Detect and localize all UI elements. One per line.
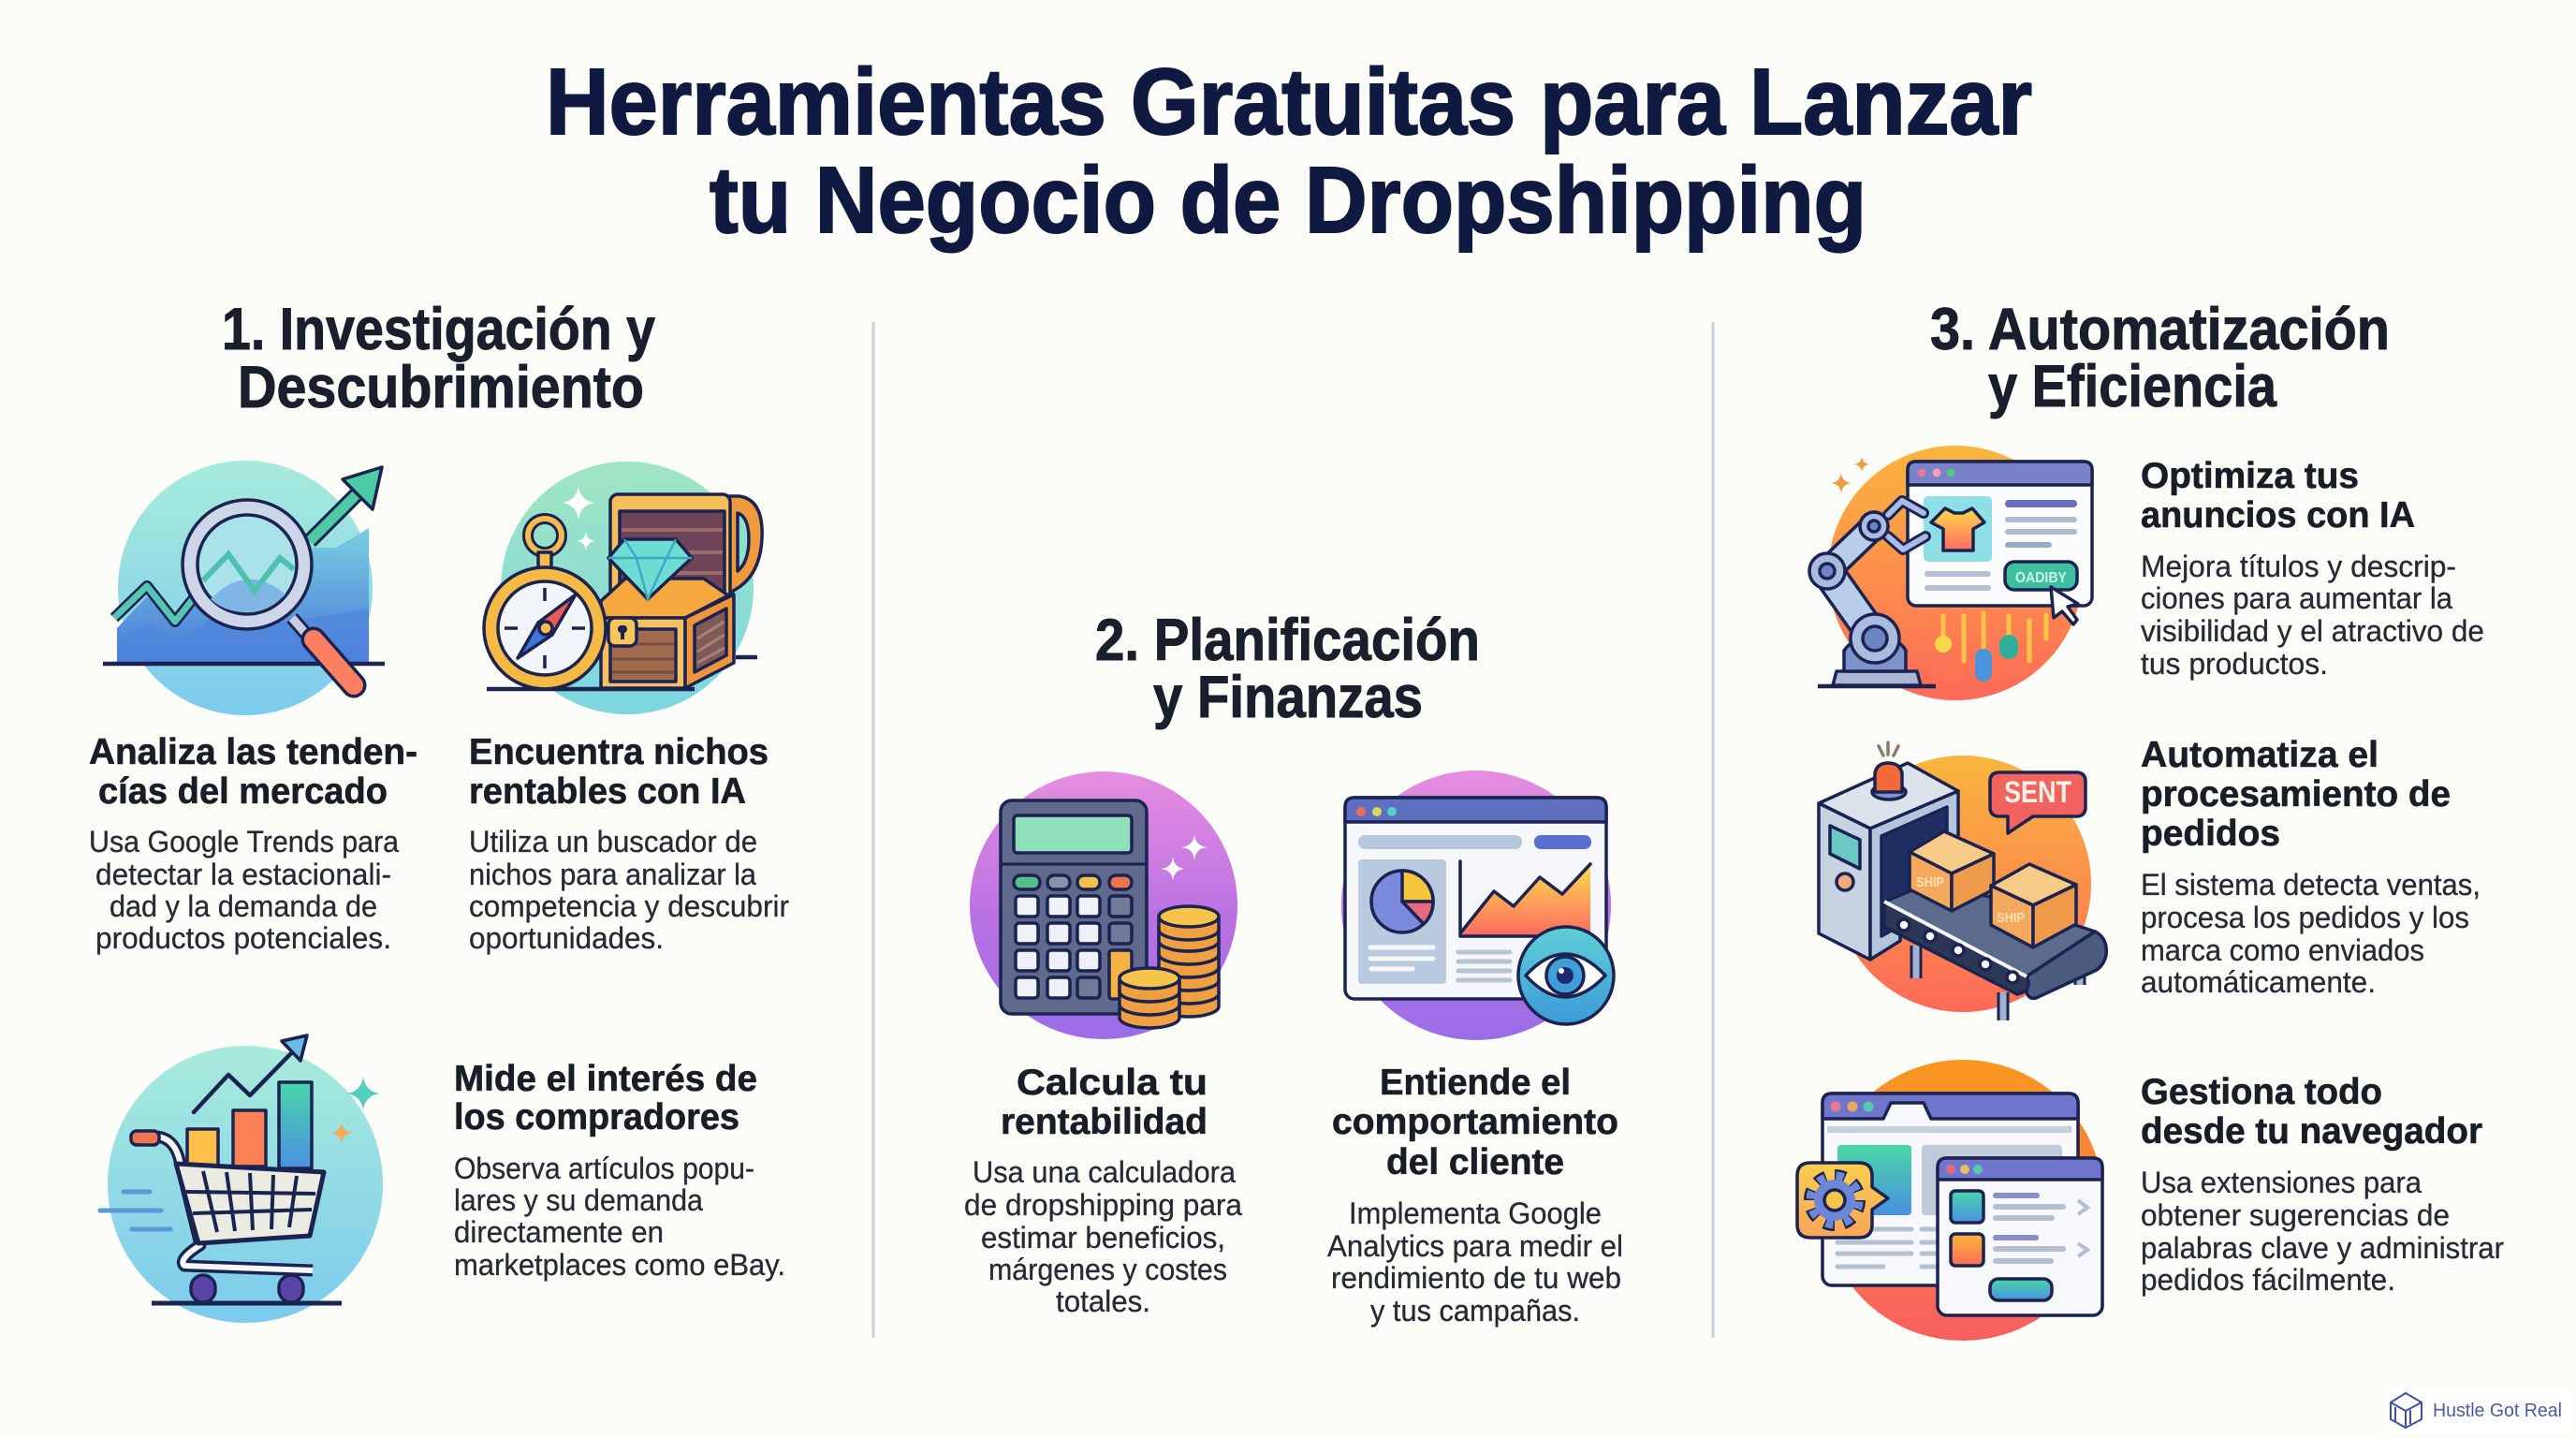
heading: section 2 [1095, 608, 1480, 730]
item text: entiende el comportamiento: y tus campañas. [1370, 1294, 1580, 1328]
title [546, 50, 2032, 253]
item text: optimiza tus anuncios: ciones para aumentar la [2141, 581, 2452, 615]
item heading: entiende el comportamiento: comportamiento [1332, 1102, 1618, 1142]
item text: automatiza el procesamiento: procesa los pedidos y los [2141, 901, 2469, 934]
item heading: encuentra nichos: rentables con IA [469, 771, 746, 812]
panel: automatización y eficiencia [1797, 297, 2504, 1341]
item text: entiende el comportamiento: Analytics para medir el [1327, 1229, 1623, 1263]
item text: gestiona todo [2141, 1166, 2504, 1297]
item heading: automatiza el procesamiento: Automatiza el [2141, 735, 2378, 775]
item text: entiende el comportamiento: Implementa Google [1349, 1196, 1602, 1230]
icon: calculator and coins [970, 771, 1237, 1039]
item text: gestiona todo: pedidos fácilmente. [2141, 1263, 2395, 1297]
item heading: calcula tu rentabilidad [1001, 1063, 1208, 1142]
item text: mide el interés: directamente en [454, 1215, 664, 1249]
item text: analiza las tendencias: dad y la demanda de [110, 889, 377, 923]
item text: encuentra nichos: nichos para analizar la [469, 858, 756, 891]
item heading: analiza las tendencias [89, 732, 417, 812]
icon: order conveyor machine: SHIP [1997, 910, 2025, 926]
title: Herramientas Gratuitas para Lanzar [546, 50, 2032, 154]
item heading: entiende el comportamiento [1332, 1063, 1618, 1182]
icon: magnifier over trend chart [103, 461, 385, 715]
item text: optimiza tus anuncios: tus productos. [2141, 647, 2328, 681]
item text: automatiza el procesamiento: automáticamente. [2141, 965, 2376, 999]
icon: robot arm and product listing: OADIBY [2015, 570, 2067, 586]
panel: planificación y finanzas [964, 608, 1623, 1328]
item heading: gestiona todo: Gestiona todo [2141, 1072, 2382, 1112]
icon: robot arm and product listing [1809, 446, 2092, 700]
item heading: gestiona todo [2141, 1072, 2482, 1152]
item text: automatiza el procesamiento [2141, 868, 2481, 999]
item text: calcula tu rentabilidad: márgenes y costes [988, 1253, 1227, 1286]
item heading: automatiza el procesamiento: procesamiento de [2141, 774, 2451, 814]
item text: mide el interés: lares y su demanda [454, 1183, 703, 1217]
item heading: calcula tu rentabilidad: Calcula tu [1017, 1063, 1208, 1103]
icon: browser extension windows [1797, 1060, 2103, 1341]
item text: gestiona todo: Usa extensiones para [2141, 1166, 2422, 1199]
heading: section 3: 3. Automatización [1930, 297, 2390, 362]
item text: calcula tu rentabilidad: estimar beneficios, [981, 1221, 1225, 1255]
item heading: encuentra nichos [469, 732, 768, 812]
item text: automatiza el procesamiento: marca como enviados [2141, 933, 2424, 967]
item text: calcula tu rentabilidad [964, 1155, 1242, 1318]
item text: analiza las tendencias: Usa Google Trends para [89, 825, 399, 858]
item text: entiende el comportamiento: rendimiento de tu web [1331, 1261, 1621, 1295]
item text: gestiona todo: palabras clave y administrar [2141, 1231, 2504, 1265]
icon: cube logo [2391, 1393, 2422, 1428]
item heading: analiza las tendencias: Analiza las tenden- [89, 732, 417, 772]
item heading: mide el interés [454, 1059, 757, 1137]
item heading: optimiza tus anuncios: Optimiza tus [2141, 456, 2359, 496]
item heading: automatiza el procesamiento: pedidos [2141, 814, 2280, 854]
item text: calcula tu rentabilidad: totales. [1056, 1284, 1150, 1318]
item text: mide el interés: marketplaces como eBay. [454, 1248, 785, 1282]
heading: section 2: y Finanzas [1153, 665, 1423, 730]
item text: automatiza el procesamiento: El sistema detecta ventas, [2141, 868, 2481, 902]
item text: optimiza tus anuncios [2141, 550, 2484, 681]
watermark: Hustle Got Real: Hustle Got Real [2433, 1400, 2562, 1421]
item heading: analiza las tendencias: cías del mercado [98, 771, 388, 812]
item heading: automatiza el procesamiento [2141, 735, 2451, 854]
item text: optimiza tus anuncios: Mejora títulos y descrip- [2141, 550, 2456, 583]
item heading: calcula tu rentabilidad: rentabilidad [1001, 1102, 1208, 1142]
item heading: gestiona todo: desde tu navegador [2141, 1111, 2482, 1152]
watermark: Hustle Got Real [2385, 1387, 2572, 1434]
icon: order conveyor machine [1819, 742, 2106, 1020]
item text: analiza las tendencias: productos potenciales. [95, 921, 391, 955]
heading: section 1: Descubrimiento [238, 355, 644, 420]
icon: shopping cart with bars [100, 1035, 383, 1323]
item text: analiza las tendencias [89, 825, 399, 955]
icon: order conveyor machine: SHIP [1916, 874, 1944, 890]
item heading: mide el interés: los compradores [454, 1097, 739, 1137]
icon: compass and treasure chest [484, 462, 762, 714]
item heading: optimiza tus anuncios: anuncios con IA [2141, 495, 2415, 536]
item text: calcula tu rentabilidad: de dropshipping para [964, 1188, 1242, 1222]
item text: encuentra nichos: Utiliza un buscador de [469, 825, 757, 858]
item text: entiende el comportamiento [1327, 1196, 1623, 1328]
item text: encuentra nichos: competencia y descubrir [469, 889, 789, 923]
item heading: encuentra nichos: Encuentra nichos [469, 732, 768, 772]
title: tu Negocio de Dropshipping [710, 148, 1866, 253]
item heading: entiende el comportamiento: Entiende el [1380, 1063, 1571, 1103]
item text: optimiza tus anuncios: visibilidad y el atractivo de [2141, 614, 2484, 648]
item text: mide el interés [454, 1152, 785, 1282]
icon: analytics browser with eye [1341, 770, 1614, 1040]
item text: gestiona todo: obtener sugerencias de [2141, 1198, 2450, 1232]
item heading: optimiza tus anuncios [2141, 456, 2415, 536]
item text: mide el interés: Observa artículos popu- [454, 1152, 754, 1185]
heading: section 2: 2. Planificación [1095, 608, 1480, 673]
item heading: entiende el comportamiento: del cliente [1386, 1142, 1564, 1182]
heading: section 3: y Eficiencia [1988, 354, 2277, 419]
item text: analiza las tendencias: detectar la estacionali- [95, 858, 391, 891]
icon: order conveyor machine: SENT [2004, 775, 2071, 809]
item heading: mide el interés: Mide el interés de [454, 1059, 757, 1099]
heading: section 3 [1930, 297, 2390, 419]
item text: calcula tu rentabilidad: Usa una calculadora [973, 1155, 1236, 1189]
item text: encuentra nichos: oportunidades. [469, 921, 664, 955]
heading: section 1: 1. Investigación y [222, 297, 655, 362]
item text: encuentra nichos [469, 825, 789, 955]
heading: section 1 [222, 297, 655, 420]
panel: investigación y descubrimiento [89, 297, 789, 1323]
